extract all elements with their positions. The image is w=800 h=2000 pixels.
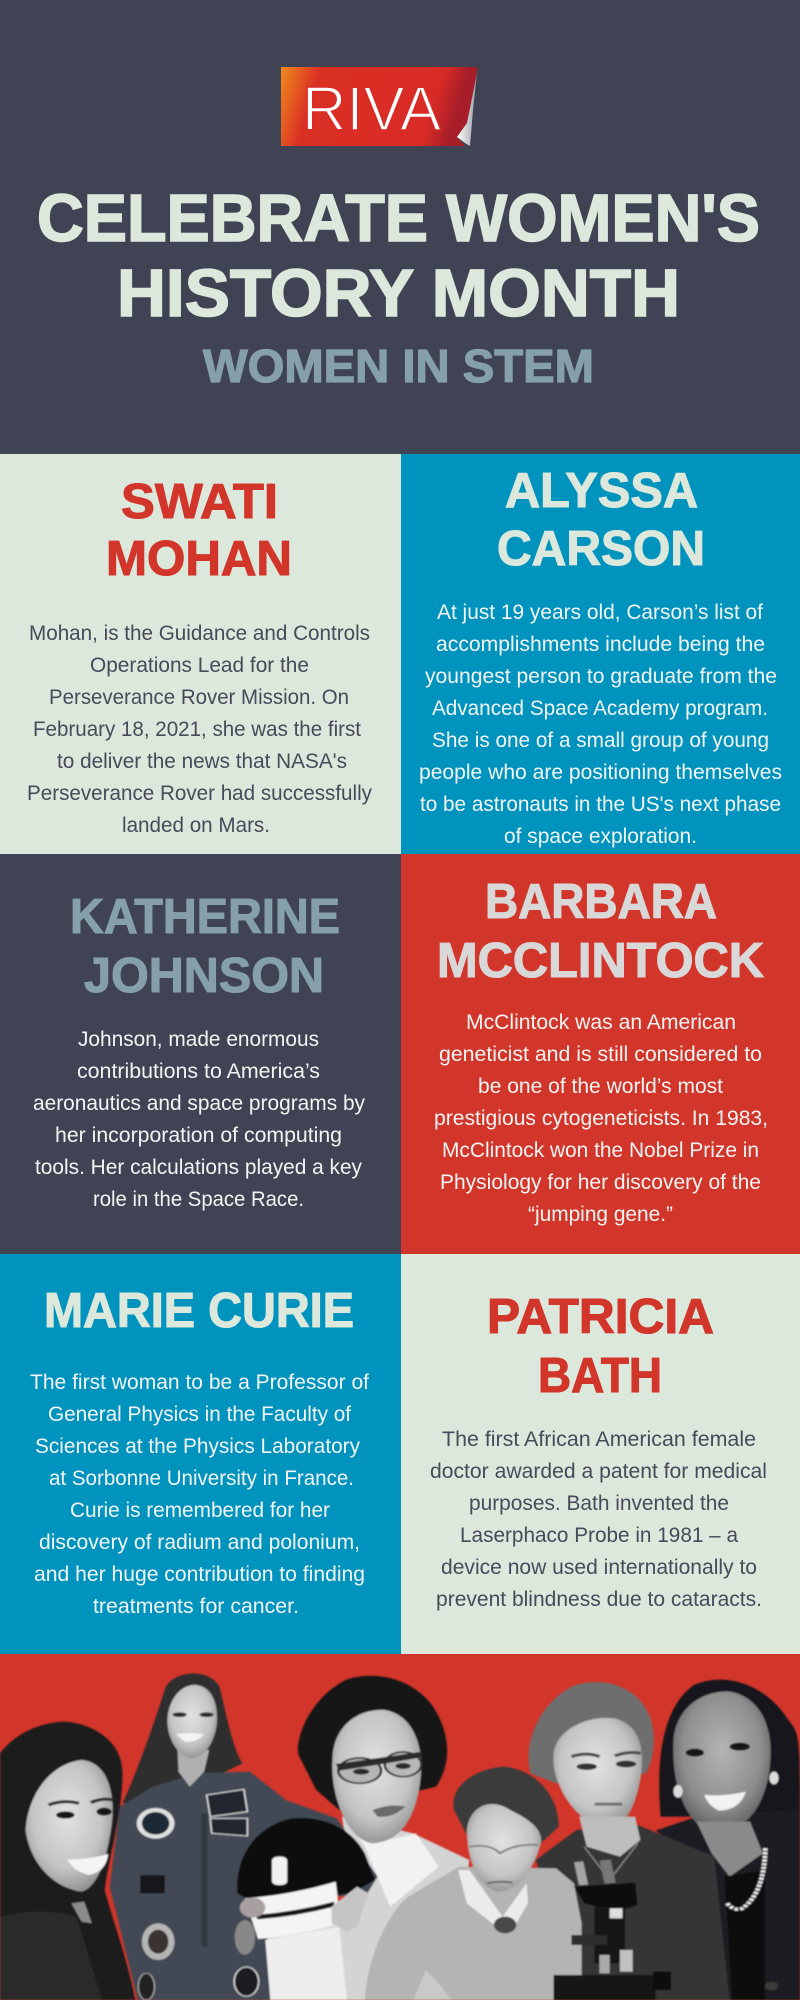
figure: Marie Curie <box>528 1682 730 2000</box>
text: Katherine Johnson biography: role in the Space Race. <box>93 1187 304 1211</box>
figure: microscope <box>554 1860 671 2000</box>
figure: space helmet <box>237 1818 375 2000</box>
panel: header <box>0 0 800 454</box>
panel: Swati Mohan <box>0 454 401 854</box>
text: Marie Curie biography: and her huge contribution to finding <box>34 1562 365 1586</box>
text: Marie Curie biography: Sciences at the Physics Laboratory <box>35 1434 360 1458</box>
text: Patricia Bath biography: The first African American female <box>442 1427 756 1451</box>
heading: Patricia Bath: BATH <box>538 1349 662 1403</box>
heading: Swati Mohan: MOHAN <box>106 532 292 586</box>
heading: Katherine Johnson <box>70 890 340 1003</box>
text: Barbara McClintock biography: McClintock won the Nobel Prize in <box>442 1138 759 1162</box>
heading: Patricia Bath <box>487 1290 714 1403</box>
text: Barbara McClintock biography <box>434 1010 768 1226</box>
text: Katherine Johnson biography: contributions to America’s <box>77 1059 320 1083</box>
title: HISTORY MONTH <box>117 256 680 331</box>
heading: Swati Mohan <box>106 475 292 586</box>
panel: Patricia Bath <box>401 1254 800 1654</box>
text: Marie Curie biography: General Physics in the Faculty of <box>48 1402 351 1426</box>
panel: Barbara McClintock <box>401 854 800 1254</box>
logo: RIVA: RIVA <box>302 75 442 144</box>
text: Barbara McClintock biography: “jumping gene.” <box>528 1202 673 1226</box>
text: Alyssa Carson biography: of space exploration. <box>504 824 697 848</box>
logo: RIVA <box>281 67 477 146</box>
text: Marie Curie biography: at Sorbonne University in France. <box>49 1466 354 1490</box>
text: Marie Curie biography: Curie is remembered for her <box>70 1498 330 1522</box>
text: Barbara McClintock biography: prestigious cytogeneticists. In 1983, <box>434 1106 768 1130</box>
text: Alyssa Carson biography: youngest person to graduate from the <box>425 664 777 688</box>
text: Patricia Bath biography: prevent blindness due to cataracts. <box>436 1587 762 1611</box>
figure: Barbara McClintock <box>365 1767 582 2000</box>
heading: Katherine Johnson: KATHERINE <box>70 890 340 944</box>
text: Marie Curie biography: treatments for cancer. <box>93 1594 299 1618</box>
text: Katherine Johnson biography: her incorporation of computing <box>55 1123 342 1147</box>
text: Alyssa Carson biography: people who are positioning themselves <box>419 760 782 784</box>
title <box>37 181 760 331</box>
text: Katherine Johnson biography <box>33 1027 365 1211</box>
text: Patricia Bath biography: doctor awarded a patent for medical <box>430 1459 767 1483</box>
text: Marie Curie biography: discovery of radium and polonium, <box>39 1530 360 1554</box>
text: Barbara McClintock biography: McClintock was an American <box>466 1010 736 1034</box>
heading: Barbara McClintock: MCCLINTOCK <box>437 934 764 988</box>
text: Swati Mohan biography: landed on Mars. <box>122 813 270 837</box>
text: Patricia Bath biography: device now used internationally to <box>441 1555 757 1579</box>
text: Swati Mohan biography: to deliver the news that NASA's <box>57 749 347 773</box>
heading: Alyssa Carson <box>497 464 705 576</box>
text: Swati Mohan biography: Mohan, is the Guidance and Controls <box>29 621 370 645</box>
text: Alyssa Carson biography: She is one of a small group of young <box>432 728 769 752</box>
text: Barbara McClintock biography: Physiology for her discovery of the <box>440 1170 761 1194</box>
panel: Marie Curie <box>0 1254 401 1654</box>
text: Katherine Johnson biography: aeronautics and space programs by <box>33 1091 365 1115</box>
text: Swati Mohan biography <box>27 621 372 837</box>
heading: Katherine Johnson: JOHNSON <box>84 949 324 1003</box>
text: Alyssa Carson biography: to be astronauts in the US's next phase <box>420 792 781 816</box>
panel: group portrait <box>0 1654 800 2000</box>
text: Katherine Johnson biography: Johnson, made enormous <box>78 1027 319 1051</box>
figure: Alyssa Carson <box>110 1674 378 2000</box>
subtitle: WOMEN IN STEM <box>203 340 594 392</box>
title: CELEBRATE WOMEN'S <box>37 181 760 256</box>
text: Patricia Bath biography: purposes. Bath invented the <box>469 1491 729 1515</box>
heading: Patricia Bath: PATRICIA <box>487 1290 714 1344</box>
text: Patricia Bath biography <box>430 1427 767 1611</box>
panel: Alyssa Carson <box>401 454 800 854</box>
heading: Barbara McClintock: BARBARA <box>485 875 717 929</box>
text: Katherine Johnson biography: tools. Her calculations played a key <box>35 1155 362 1179</box>
figure: Swati Mohan <box>0 1722 135 2000</box>
panel: Katherine Johnson <box>0 854 401 1254</box>
text: Swati Mohan biography: February 18, 2021, she was the first <box>33 717 361 741</box>
heading: Marie Curie: MARIE CURIE <box>44 1284 354 1338</box>
text: Swati Mohan biography: Perseverance Rover had successfully <box>27 781 372 805</box>
text: Swati Mohan biography: Operations Lead for the <box>90 653 309 677</box>
text: Swati Mohan biography: Perseverance Rover Mission. On <box>49 685 349 709</box>
figure: Patricia Bath <box>656 1680 800 2000</box>
heading: Alyssa Carson: CARSON <box>497 522 705 576</box>
heading: Alyssa Carson: ALYSSA <box>505 464 698 518</box>
heading: Barbara McClintock <box>437 875 764 988</box>
text: Marie Curie biography: The first woman to be a Professor of <box>30 1370 369 1394</box>
text: Alyssa Carson biography: At just 19 years old, Carson’s list of <box>437 600 763 624</box>
figure: Katherine Johnson <box>263 1676 469 2000</box>
text: Alyssa Carson biography: Advanced Space Academy program. <box>432 696 768 720</box>
text: Marie Curie biography <box>30 1370 369 1618</box>
text: Patricia Bath biography: Laserphaco Probe in 1981 – a <box>460 1523 738 1547</box>
text: Barbara McClintock biography: be one of the world’s most <box>478 1074 723 1098</box>
text: Alyssa Carson biography: accomplishments include being the <box>436 632 765 656</box>
text: Barbara McClintock biography: geneticist and is still considered to <box>439 1042 762 1066</box>
heading: Swati Mohan: SWATI <box>121 475 278 529</box>
text: Alyssa Carson biography <box>419 600 782 848</box>
